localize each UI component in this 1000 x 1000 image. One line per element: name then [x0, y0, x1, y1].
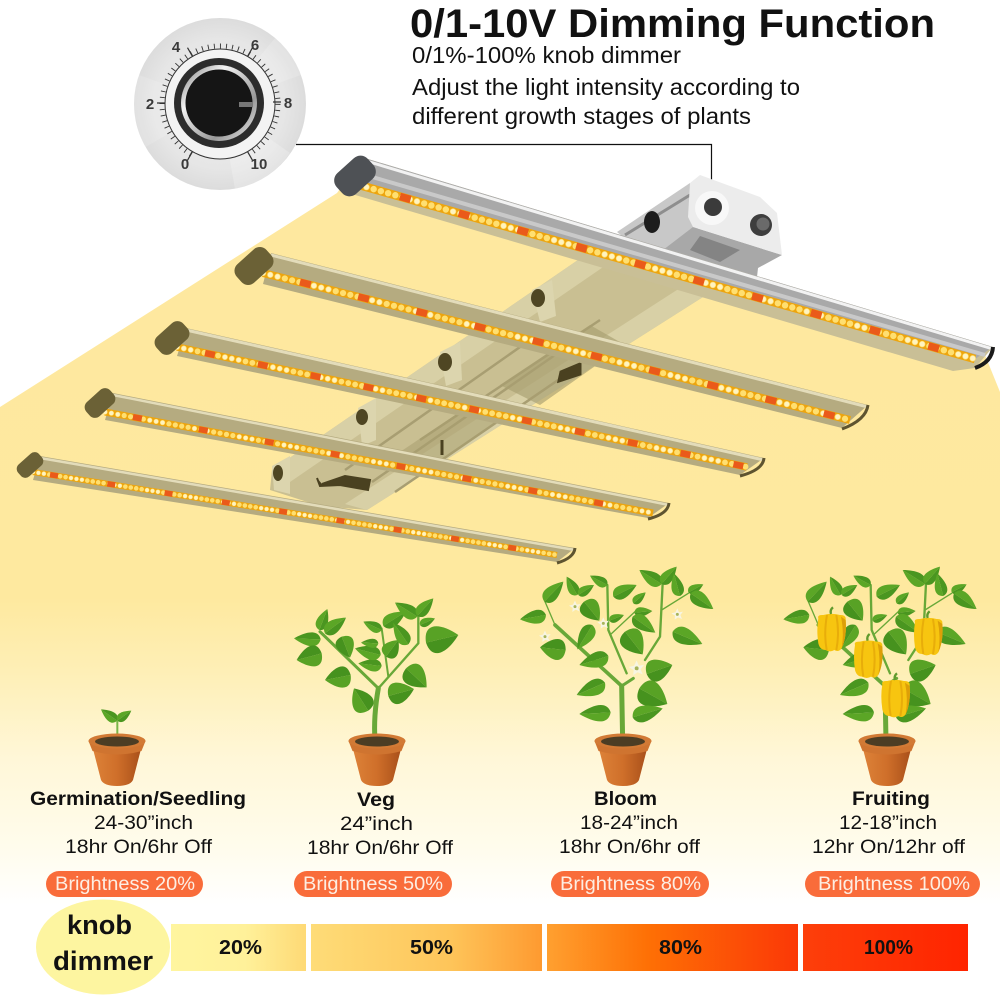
stage text: bloom — [559, 788, 701, 858]
icon: dimmer dial: 6 — [251, 37, 259, 54]
stage text: fruiting: Fruiting — [852, 788, 930, 810]
bracket knob 1 — [531, 289, 545, 307]
scale segment 50% — [311, 924, 542, 971]
knob dimmer label — [36, 900, 170, 994]
scale segment 80% — [547, 924, 798, 971]
badge: brightness 20% — [46, 871, 203, 897]
knob dimmer label: dimmer — [53, 946, 153, 976]
icon: dimmer dial: 8 — [284, 95, 292, 112]
bracket knob 4 — [273, 465, 283, 481]
scale segment 20% — [171, 924, 306, 971]
icon: dimmer dial — [134, 18, 306, 190]
power connector — [750, 214, 772, 236]
light beam background — [0, 175, 1000, 905]
stage text: germination: Germination/Seedling — [30, 788, 246, 810]
small latch — [440, 440, 444, 455]
title: 0/1-10V Dimming Function — [410, 2, 935, 46]
plant: bloom — [519, 563, 718, 786]
badge: brightness 20%: Brightness 20% — [55, 874, 195, 895]
bracket 2 — [440, 342, 462, 386]
plant: seedling — [88, 705, 146, 786]
stage text: veg: 24”inch — [340, 813, 413, 835]
bracket 1 — [532, 280, 556, 322]
icon: dimmer dial: 0 — [181, 156, 189, 173]
stage text: fruiting — [812, 788, 966, 858]
icon: dimmer dial: 10 — [251, 156, 267, 173]
description text: 0/1%-100% knob dimmer — [412, 42, 681, 68]
scale segment 100% — [803, 924, 968, 971]
stage text: germination: 18hr On/6hr Off — [65, 836, 213, 858]
badge: brightness 50%: Brightness 50% — [303, 874, 443, 895]
bracket knob 2 — [438, 353, 452, 371]
cable clip — [559, 364, 580, 381]
icon: dimmer dial: 4 — [172, 39, 181, 56]
badge: brightness 100% — [805, 871, 980, 897]
LED bar 3 — [151, 318, 764, 476]
bracket knob 3 — [356, 409, 368, 425]
leader line from dial to knob — [296, 144, 712, 203]
badge: brightness 80% — [551, 871, 709, 897]
knob dimmer label: knob — [67, 910, 132, 940]
stage text: bloom: Bloom — [594, 788, 657, 810]
bracket 4 — [272, 456, 290, 494]
scale segment 100%: 100% — [864, 937, 913, 959]
stage text: fruiting: 12-18”inch — [839, 812, 937, 834]
LED bar 1 — [330, 152, 993, 371]
badge: brightness 80%: Brightness 80% — [560, 874, 701, 895]
scale segment 50%: 50% — [410, 937, 453, 959]
LED bar 4 — [82, 385, 669, 519]
LED bar 2 — [231, 243, 868, 429]
description text: different growth stages of plants — [412, 103, 751, 129]
driver box — [617, 175, 782, 277]
stage text: bloom: 18hr On/6hr off — [559, 836, 701, 858]
stage text: fruiting: 12hr On/12hr off — [812, 836, 966, 858]
stage text: germination: 24-30”inch — [94, 812, 193, 834]
dimmer knob on box — [704, 198, 722, 216]
description text — [412, 42, 800, 129]
plant: fruiting — [782, 563, 981, 786]
hanging hook dark — [317, 476, 370, 490]
mounting rails — [270, 238, 703, 510]
black side knob — [644, 211, 660, 233]
stage text: veg: 18hr On/6hr Off — [307, 837, 454, 859]
icon: dimmer dial: 2 — [146, 96, 154, 113]
LED bar 5 — [14, 450, 575, 563]
stage text: veg: Veg — [357, 789, 395, 811]
stage text: bloom: 18-24”inch — [580, 812, 678, 834]
badge: brightness 50% — [294, 871, 452, 897]
stage text: veg — [307, 789, 454, 859]
stage text: germination — [30, 788, 246, 858]
scale segment 20%: 20% — [219, 937, 262, 959]
badge: brightness 100%: Brightness 100% — [818, 874, 970, 895]
plant: veg — [294, 594, 461, 786]
description text: Adjust the light intensity according to — [412, 74, 800, 100]
bracket 3 — [358, 398, 376, 446]
scale segment 80%: 80% — [659, 937, 702, 959]
